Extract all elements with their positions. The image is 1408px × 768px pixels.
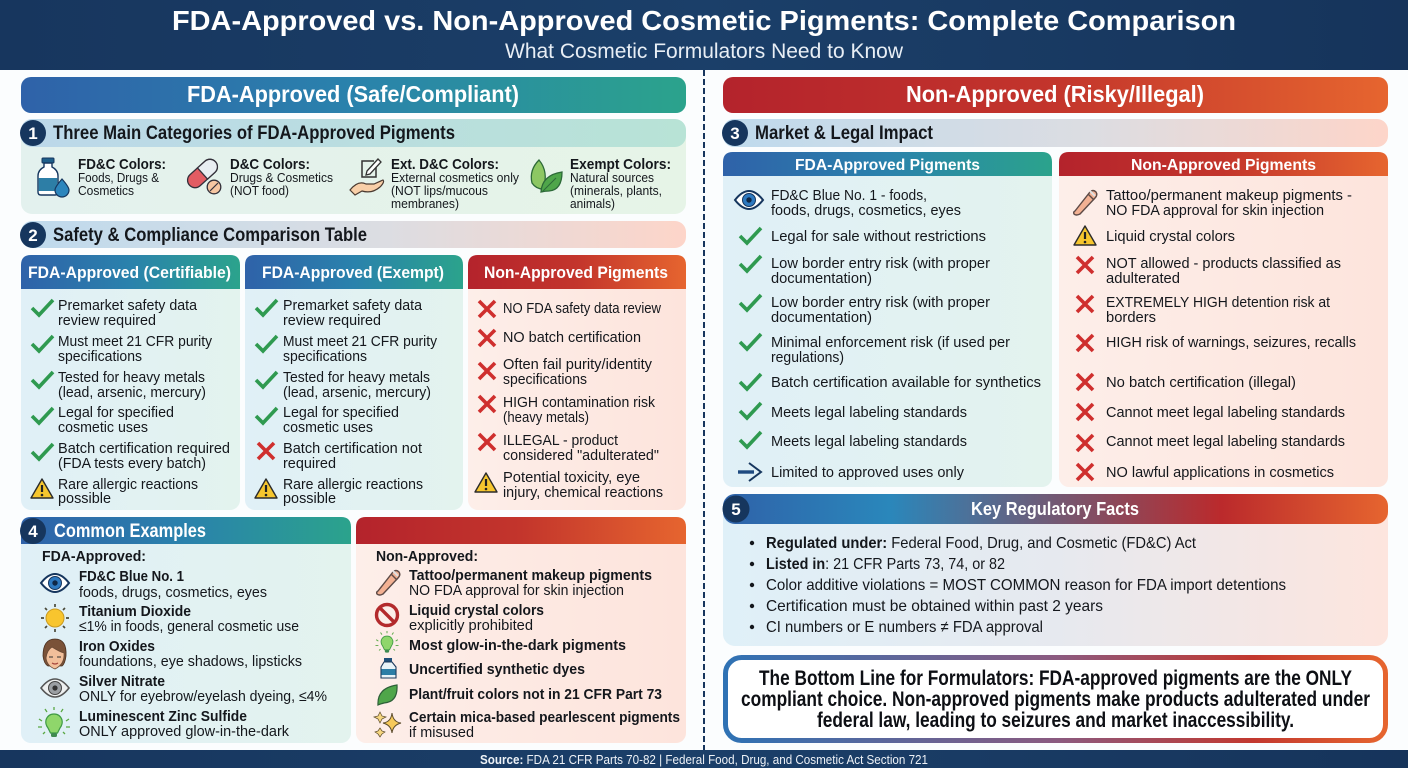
section 2 heading	[20, 221, 686, 248]
impact list: regulations)	[771, 349, 844, 366]
icon: face	[43, 639, 66, 669]
silver nitrate text: ONLY for eyebrow/eyelash dyeing, ≤4%	[79, 688, 327, 705]
impact list: FD&C Blue No. 1 - foods,	[771, 187, 927, 204]
section 1 heading: Three Main Categories of FDA-Approved Pigments	[53, 123, 455, 144]
left banner: FDA-Approved: FDA-Approved (Safe/Compliant)	[187, 81, 519, 107]
check list	[31, 297, 230, 507]
iron oxides text	[79, 638, 302, 670]
icon: bulb	[375, 631, 399, 653]
subtitle: What Cosmetic Formulators Need to Know	[505, 40, 904, 63]
risk list: (heavy metals)	[503, 409, 589, 426]
silver nitrate text	[79, 673, 327, 705]
D&C colors text: D&C Colors:	[230, 156, 310, 173]
impact list	[735, 187, 1041, 481]
FD&C colors text: FD&C Colors:	[78, 156, 166, 173]
risk list: specifications	[503, 371, 587, 388]
check list: Rare allergic reactions	[283, 476, 423, 493]
exempt colors text	[570, 156, 671, 211]
FD&C Blue text: FD&C Blue No. 1	[79, 568, 184, 585]
check list: Must meet 21 CFR purity	[58, 333, 212, 350]
panel: key regulatory facts: 5	[731, 500, 741, 519]
panel: FDA-approved exempt column	[245, 255, 463, 510]
check list: specifications	[58, 348, 142, 365]
impact list: No batch certification (illegal)	[1106, 374, 1296, 391]
liquid crystal text: explicitly prohibited	[409, 617, 533, 634]
check list: possible	[283, 490, 336, 507]
icon: sparkles	[374, 712, 401, 737]
panel: market impact non-approved	[1059, 152, 1388, 487]
impact list: NO lawful applications in cosmetics	[1106, 464, 1334, 481]
left banner: FDA-Approved	[21, 77, 686, 113]
uncertified dyes text: Uncertified synthetic dyes	[409, 661, 585, 678]
panel: non-approved column: Non-Approved Pigments	[484, 263, 668, 282]
panel: key regulatory facts: Key Regulatory Facts	[971, 499, 1139, 519]
exempt colors text: Exempt Colors:	[570, 156, 671, 173]
FD&C colors text: Foods, Drugs &	[78, 170, 159, 185]
exempt colors text: animals)	[570, 196, 615, 211]
section 3 heading: Market & Legal Impact	[755, 123, 934, 144]
silver nitrate text: Silver Nitrate	[79, 673, 165, 690]
FD&C Blue text	[79, 568, 267, 601]
Ext. D&C colors text	[391, 156, 519, 211]
footer source bar: Source: FDA 21 CFR Parts 70-82 | Federal Food, Drug, and Cosmetic Act Section 721	[480, 752, 928, 767]
panel: non-approved column	[468, 255, 686, 510]
icon: bottle	[38, 158, 69, 197]
section 3 heading: 3	[730, 124, 740, 143]
impact list: documentation)	[771, 309, 872, 326]
exempt colors text: (minerals, plants,	[570, 183, 662, 198]
icon: arrow	[738, 463, 761, 481]
impact list	[1074, 187, 1356, 481]
icon: leaves	[531, 160, 562, 192]
callout: bottom line	[726, 658, 1386, 740]
bullets list: Color additive violations = MOST COMMON reason for FDA import detentions	[766, 577, 1286, 594]
check list: specifications	[283, 348, 367, 365]
luminescent zinc sulfide text: Luminescent Zinc Sulfide	[79, 708, 247, 725]
liquid crystal text: Liquid crystal colors	[409, 602, 544, 619]
check list: possible	[58, 490, 111, 507]
icon: pill	[184, 156, 221, 194]
check list: Legal for specified	[283, 404, 399, 421]
titanium dioxide text: ≤1% in foods, general cosmetic use	[79, 618, 299, 635]
check list: Rare allergic reactions	[58, 476, 198, 493]
titanium dioxide text	[79, 603, 299, 635]
risk list: Potential toxicity, eye	[503, 469, 640, 486]
impact list: Liquid crystal colors	[1106, 228, 1235, 245]
impact list: Cannot meet legal labeling standards	[1106, 404, 1345, 421]
check list: (lead, arsenic, mercury)	[283, 384, 431, 401]
icon: bulb	[38, 707, 70, 737]
bullets list: CI numbers or E numbers ≠ FDA approval	[766, 619, 1043, 636]
liquid crystal text	[409, 602, 544, 634]
mica text	[409, 709, 680, 741]
panel: common examples non-approved	[356, 517, 686, 743]
impact list: Limited to approved uses only	[771, 464, 964, 481]
title: FDA-Approved vs. Non-Approved Cosmetic Pigments: Complete Comparison	[172, 5, 1236, 36]
titanium dioxide text: Titanium Dioxide	[79, 603, 191, 620]
center dashed divider	[703, 70, 705, 750]
mica text: Certain mica-based pearlescent pigments	[409, 709, 680, 726]
Ext. D&C colors text: External cosmetics only	[391, 170, 519, 185]
panel: FDA-approved exempt column: FDA-Approved (Exempt)	[262, 263, 444, 282]
plant colors text: Plant/fruit colors not in 21 CFR Part 73	[409, 686, 662, 703]
impact list: Meets legal labeling standards	[771, 404, 967, 421]
Ext. D&C colors text: (NOT lips/mucous	[391, 183, 488, 198]
panel: FDA-approved certifiable column: FDA-Approved (Certifiable)	[28, 263, 231, 282]
panel: three main categories	[20, 119, 686, 214]
panel: market impact FDA-approved: FDA-Approved Pigments	[795, 157, 980, 174]
risk list: considered "adulterated"	[503, 447, 659, 464]
impact list: Tattoo/permanent makeup pigments -	[1106, 187, 1352, 204]
header band	[0, 0, 1408, 70]
icon: leaf	[378, 685, 397, 705]
impact list: Meets legal labeling standards	[771, 433, 967, 450]
icon: hand and note	[350, 159, 384, 195]
panel: key regulatory facts	[722, 494, 1388, 646]
check list: required	[283, 455, 336, 472]
risk list: Often fail purity/identity	[503, 356, 652, 373]
luminescent zinc sulfide text: ONLY approved glow-in-the-dark	[79, 723, 289, 740]
icon: prohibited sign	[376, 604, 398, 626]
D&C colors text: Drugs & Cosmetics	[230, 170, 333, 185]
impact list: NO FDA approval for skin injection	[1106, 202, 1324, 219]
footer source bar	[0, 750, 1408, 768]
check list: Batch certification not	[283, 440, 423, 457]
check list: review required	[283, 312, 381, 329]
impact list: borders	[1106, 309, 1156, 326]
icon: tattoo pen	[377, 570, 400, 595]
impact list: Legal for sale without restrictions	[771, 228, 986, 245]
icon: small bottle	[381, 658, 396, 678]
panel: common examples FDA-approved: Common Examples	[54, 521, 206, 542]
bullets list: Certification must be obtained within past 2 years	[766, 598, 1103, 615]
FD&C colors text: Cosmetics	[78, 183, 134, 198]
impact list: documentation)	[771, 270, 872, 287]
Ext. D&C colors text: membranes)	[391, 196, 459, 211]
check list: review required	[58, 312, 156, 329]
section 3 heading	[722, 119, 1388, 147]
risk list: injury, chemical reactions	[503, 484, 663, 501]
iron oxides text: Iron Oxides	[79, 638, 155, 655]
right banner: Non-Approved: Non-Approved (Risky/Illegal)	[906, 81, 1204, 107]
exempt colors text: Natural sources	[570, 170, 654, 185]
section 2 heading: 2	[28, 226, 38, 245]
check list: Premarket safety data	[283, 297, 423, 314]
panel: common examples FDA-approved: FDA-Approved:	[42, 548, 146, 565]
panel: common examples FDA-approved: 4	[28, 522, 38, 541]
FD&C colors text	[78, 156, 166, 198]
icon: grey eye	[41, 679, 69, 697]
panel: market impact FDA-approved	[723, 152, 1052, 487]
Ext. D&C colors text: Ext. D&C Colors:	[391, 156, 499, 173]
glow text: Most glow-in-the-dark pigments	[409, 637, 626, 654]
check list: cosmetic uses	[58, 419, 148, 436]
impact list: EXTREMELY HIGH detention risk at	[1106, 294, 1331, 311]
risk list: HIGH contamination risk	[503, 394, 655, 411]
section 2 heading: Safety & Compliance Comparison Table	[53, 225, 367, 246]
risk list	[475, 300, 663, 501]
check list: cosmetic uses	[283, 419, 373, 436]
impact list: foods, drugs, cosmetics, eyes	[771, 202, 961, 219]
risk list: NO batch certification	[503, 329, 641, 346]
check list: (lead, arsenic, mercury)	[58, 384, 206, 401]
impact list: Low border entry risk (with proper	[771, 294, 990, 311]
tattoo text: Tattoo/permanent makeup pigments	[409, 567, 652, 584]
bullets list	[750, 535, 1286, 636]
bullets list: Listed in: 21 CFR Parts 73, 74, or 82	[766, 556, 1005, 573]
check list: Tested for heavy metals	[58, 369, 205, 386]
iron oxides text: foundations, eye shadows, lipsticks	[79, 653, 302, 670]
bullets list: Regulated under: Federal Food, Drug, and Cosmetic (FD&C) Act	[766, 535, 1197, 552]
risk list: ILLEGAL - product	[503, 432, 619, 449]
tattoo text	[409, 567, 652, 599]
tattoo text: NO FDA approval for skin injection	[409, 582, 624, 599]
check list: Legal for specified	[58, 404, 174, 421]
check list: Must meet 21 CFR purity	[283, 333, 437, 350]
right banner: Non-Approved	[723, 77, 1388, 113]
callout: bottom line: federal law, leading to seizures and market inaccessibility.	[817, 709, 1294, 732]
FD&C Blue text: foods, drugs, cosmetics, eyes	[79, 584, 267, 601]
section 1 heading	[20, 119, 686, 147]
impact list: NOT allowed - products classified as	[1106, 255, 1341, 272]
icon: eye	[41, 574, 69, 592]
icon: sun	[41, 604, 69, 632]
impact list: HIGH risk of warnings, seizures, recalls	[1106, 334, 1356, 351]
panel: common examples non-approved: Non-Approved:	[376, 548, 478, 565]
luminescent zinc sulfide text	[79, 708, 289, 740]
impact list: Minimal enforcement risk (if used per	[771, 334, 1010, 351]
check list	[255, 297, 437, 507]
check list: Premarket safety data	[58, 297, 198, 314]
risk list: NO FDA safety data review	[503, 300, 661, 317]
check list: (FDA tests every batch)	[58, 455, 206, 472]
panel: FDA-approved certifiable column	[21, 255, 240, 510]
section 1 heading: 1	[28, 124, 38, 143]
impact list: Batch certification available for synthetics	[771, 374, 1041, 391]
D&C colors text: (NOT food)	[230, 183, 289, 198]
check list: Batch certification required	[58, 440, 230, 457]
impact list: Cannot meet legal labeling standards	[1106, 433, 1345, 450]
check list: Tested for heavy metals	[283, 369, 430, 386]
panel: market impact non-approved: Non-Approved Pigments	[1131, 157, 1316, 174]
impact list: Low border entry risk (with proper	[771, 255, 990, 272]
D&C colors text	[230, 156, 333, 198]
panel: common examples FDA-approved	[20, 517, 351, 743]
impact list: adulterated	[1106, 270, 1180, 287]
mica text: if misused	[409, 724, 474, 741]
